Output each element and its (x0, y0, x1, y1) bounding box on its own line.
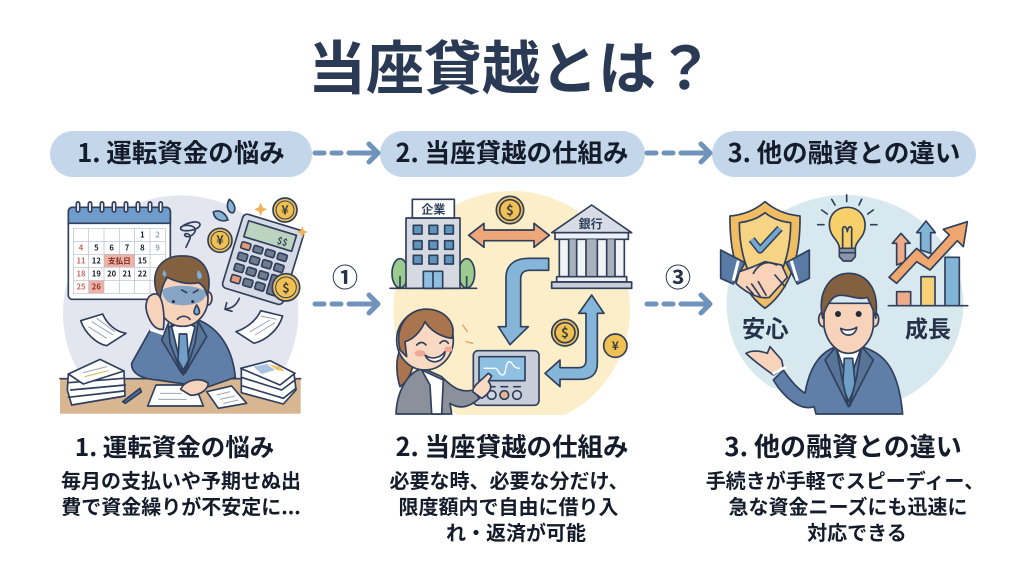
body: column 2: れ・返済が可能 (446, 517, 586, 546)
calendar (68, 202, 170, 299)
calendar: 15 (138, 256, 147, 267)
background circle (727, 195, 963, 403)
icon: shield (730, 202, 800, 308)
body: column 1: 費で資金繰りが不安定に... (61, 491, 301, 520)
step pills row (50, 131, 976, 177)
calendar: 2 (155, 230, 160, 241)
coin symbols: ¥ (216, 230, 224, 249)
coin symbols: ¥ (281, 199, 289, 218)
text block: column 2 (390, 427, 629, 546)
calendar: 6 (109, 243, 114, 254)
building: bank: 銀行 (579, 215, 603, 232)
heading: column 3: 3. 他の融資との違い (724, 427, 962, 464)
pen (123, 388, 141, 403)
icon: sweat drops (213, 199, 235, 221)
text block: column 1 (61, 429, 301, 520)
person: worried businessman (132, 256, 235, 387)
calendar: 9 (155, 243, 160, 254)
icon: light bulb (818, 195, 877, 261)
pill: step 1 (50, 131, 312, 177)
calendar: 22 (138, 269, 147, 280)
building: bank (552, 205, 632, 288)
pill: step 3: 3. 他の融資との違い (728, 133, 960, 170)
arrow: bank to terminal (498, 258, 549, 345)
label: peace of mind: 安心 (742, 310, 789, 344)
illustration: overdraft mechanism (390, 191, 632, 415)
calendar: 19 (92, 269, 101, 280)
icon: calculator: $$ (275, 234, 289, 249)
background circle (393, 191, 630, 415)
body: column 2: 必要な時、必要な分だけ、 (390, 465, 628, 494)
calendar: 11 (76, 256, 86, 267)
body: column 2: 限度額内で自由に借り入 (398, 491, 618, 520)
icon: flying paper right (236, 311, 283, 343)
arrow: pill 1 to pill 2 (315, 144, 378, 162)
icon: coins (208, 198, 300, 301)
calendar: 20 (107, 269, 117, 280)
hand on desk (181, 380, 208, 395)
calendar: 12 (92, 256, 101, 267)
icon: small curved arrow (225, 298, 239, 311)
icon: calculator (221, 213, 305, 306)
calendar: 支払日 (108, 256, 131, 267)
label: circled 3: ③ (665, 258, 691, 295)
calendar: 1 (140, 230, 145, 241)
label: growth: 成長 (905, 310, 951, 344)
icon: growth chart (888, 221, 968, 306)
arrow: terminal to bank (545, 295, 604, 387)
coin: dollar lower: $ (561, 323, 569, 342)
calendar: 21 (122, 269, 132, 280)
icon: worry scribble (181, 222, 200, 247)
calendar: 7 (125, 243, 130, 254)
calendar: 25 (76, 282, 86, 293)
coin symbols (216, 199, 290, 296)
icon: sparkles (254, 203, 308, 238)
icon: handshake (721, 250, 809, 298)
heading: column 1: 1. 運転資金の悩み (75, 429, 274, 464)
body: column 3: 対応できる (807, 517, 907, 546)
coin: dollar top: $ (506, 200, 514, 219)
illustration: comparison benefits (721, 195, 968, 414)
arrow: illustration 1 to 2 (315, 295, 378, 313)
person: smiling businessman (746, 273, 903, 414)
body: column 3: 手続きが手軽でスピーディー、 (706, 465, 984, 494)
label: circled 1: ① (332, 258, 358, 295)
calendar: 26 (92, 282, 101, 293)
pill: step 2: 2. 当座貸越の仕組み (395, 133, 629, 170)
body: column 3 (706, 465, 984, 546)
coin: yen (604, 334, 627, 357)
arrow: double headed company bank (469, 223, 549, 247)
document stack right (241, 361, 296, 404)
terminal device (473, 351, 539, 405)
title: 当座貸越とは？ (308, 22, 714, 106)
coin: dollar top (496, 196, 524, 224)
text block: column 3 (706, 427, 984, 546)
icon: flying paper left (81, 314, 126, 346)
building: company (390, 199, 477, 288)
building: company: 企業 (421, 200, 445, 217)
calendar: 18 (76, 269, 86, 280)
calendar: 4 (79, 243, 84, 254)
coin: yen: ¥ (612, 337, 619, 354)
body: column 3: 急な資金ニーズにも迅速に (728, 491, 968, 520)
calendar: 8 (140, 243, 145, 254)
document stack left (67, 359, 125, 405)
heading: column 2: 2. 当座貸越の仕組み (395, 427, 629, 464)
coin symbols: $ (282, 277, 290, 296)
document on desk (148, 385, 247, 408)
background circle (63, 195, 298, 379)
illustration: cash flow worries (60, 195, 308, 414)
desk (60, 379, 301, 414)
person: smiling woman (396, 309, 492, 414)
calendar: 5 (94, 243, 99, 254)
body: column 1 (61, 465, 301, 520)
arrow: illustration 2 to 3 (647, 295, 710, 313)
body: column 2 (390, 465, 628, 546)
arrow: pill 2 to pill 3 (647, 144, 710, 162)
pill: step 1: 1. 運転資金の悩み (77, 133, 285, 170)
coin: dollar lower (552, 319, 578, 346)
body: column 1: 毎月の支払いや予期せぬ出 (61, 465, 301, 494)
